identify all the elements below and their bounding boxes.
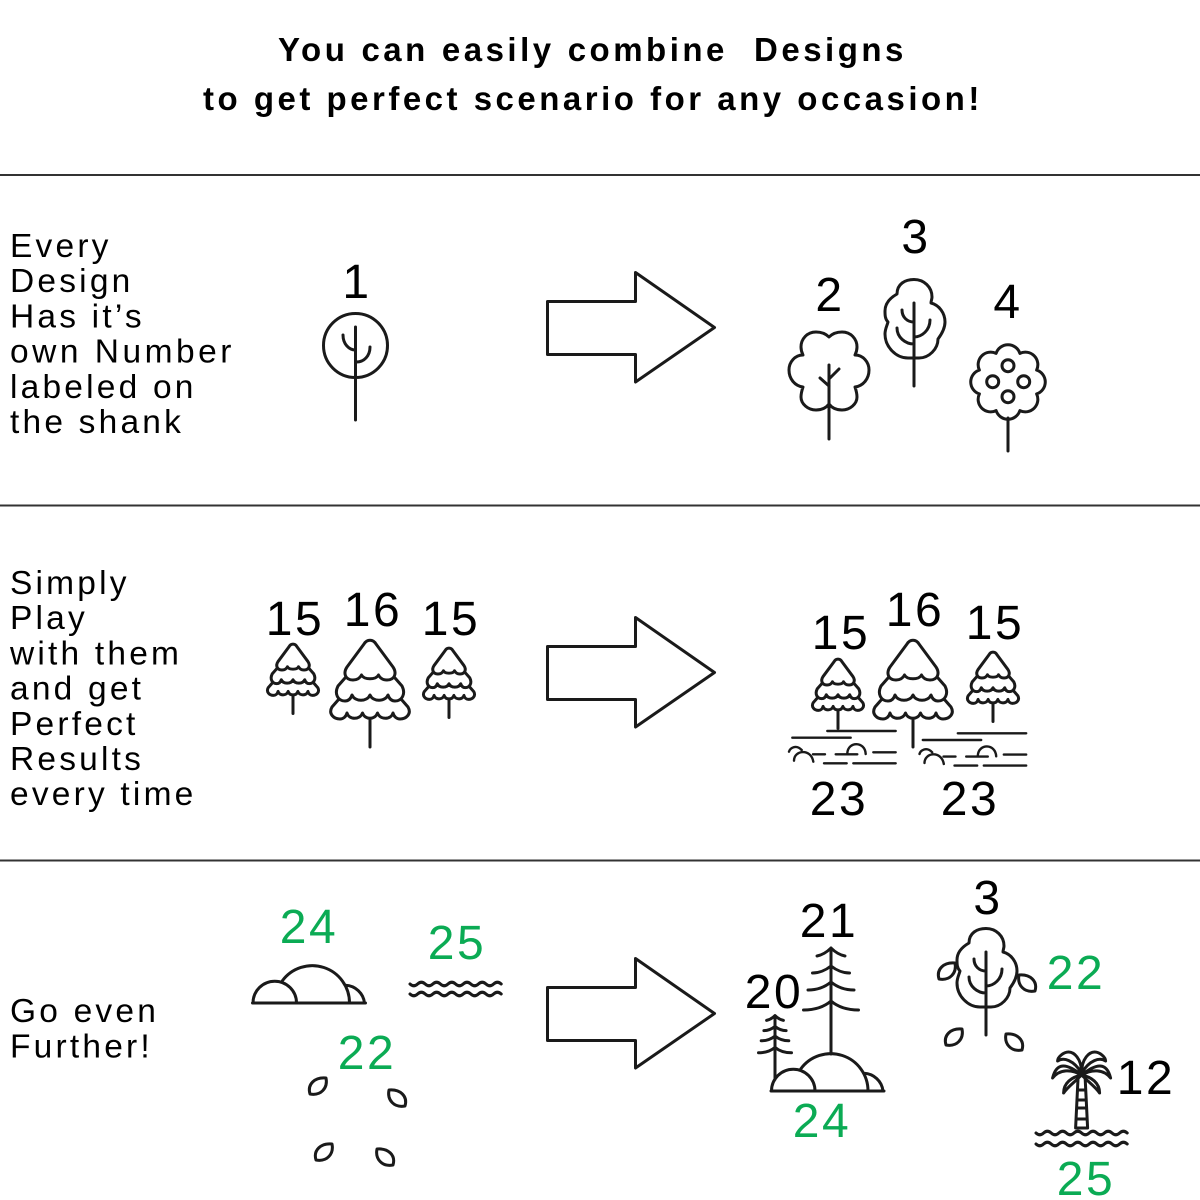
arrow [548, 618, 714, 727]
icon: pine 15 right: 15 [422, 593, 480, 646]
icon: tree 1 [324, 256, 388, 420]
icon: water 25: 25 [428, 917, 486, 970]
icon: tree 2 [789, 269, 869, 439]
arrow [548, 958, 714, 1068]
combined scene: pines on hills: 24 [793, 1095, 851, 1148]
combined scene: pines on hills: 21 [800, 895, 858, 948]
text block: row 2 description: every time [10, 776, 197, 813]
icon: tree 3: 3 [901, 211, 931, 264]
icon: pine 15 left [266, 593, 324, 714]
combined scene: pines and ground: 23 [941, 773, 999, 826]
combined scene: palm on water: 12 [1117, 1052, 1175, 1105]
text block: row 1 description: Has it’s [10, 298, 145, 335]
text block: row 1 description: own Number [10, 334, 235, 371]
arrow [548, 272, 714, 382]
title: to get perfect scenario for any occasion! [203, 80, 983, 117]
text block: row 3 description [10, 993, 159, 1066]
text block: row 2 description: and get [10, 671, 144, 708]
combined scene: palm on water [1036, 1052, 1175, 1200]
text block: row 2 description: with them [9, 635, 182, 672]
icon: pine 16: 16 [344, 584, 402, 637]
icon: leaves 22 [309, 1027, 406, 1165]
text block: row 2 description [9, 565, 197, 813]
combined scene: pines and ground: 15 [966, 597, 1024, 650]
combined scene: tree with leaves: 22 [1047, 947, 1105, 1000]
icon: tree 2: 2 [815, 269, 845, 322]
icon: hills 24: 24 [280, 901, 338, 954]
text block: row 1 description: labeled on [10, 369, 197, 406]
combined scene: tree with leaves: 3 [973, 872, 1003, 925]
icon: tree 4: 4 [993, 276, 1023, 329]
text block: row 2 description: Results [10, 741, 144, 778]
combined scene: pines on hills [745, 895, 884, 1148]
icon: pine 15 right [422, 593, 480, 718]
icon: tree 4 [971, 276, 1045, 451]
text block: row 1 description: the shank [10, 404, 184, 441]
icon: tree 1: 1 [342, 256, 372, 309]
icon: water 25 [410, 917, 501, 996]
text block: row 1 description: Design [10, 263, 133, 300]
panel: simply play with them [9, 565, 1026, 826]
icon: tree 3 [885, 211, 945, 386]
combined scene: pines and ground: 16 [886, 584, 944, 637]
text block: row 2 description: Play [10, 600, 88, 637]
title [203, 31, 983, 117]
combined scene: pines and ground [789, 584, 1026, 826]
text block: row 3 description: Further! [10, 1028, 153, 1066]
text block: row 1 description: Every [10, 228, 112, 265]
combined scene: pines and ground: 15 [812, 607, 870, 660]
panel: every design has its own number [10, 211, 1045, 451]
combined scene: pines and ground: 23 [810, 773, 868, 826]
text block: row 3 description: Go even [10, 993, 159, 1030]
title: You can easily combine Designs [278, 31, 907, 68]
text block: row 1 description [10, 228, 235, 441]
combined scene: pines on hills: 20 [745, 966, 803, 1019]
combined scene: tree with leaves [938, 872, 1105, 1050]
icon: leaves 22: 22 [338, 1027, 396, 1080]
panel: go even further [10, 872, 1175, 1200]
icon: pine 15 left: 15 [266, 593, 324, 646]
text block: row 2 description: Perfect [10, 706, 139, 743]
icon: hills 24 [252, 901, 366, 1003]
icon: pine 16 [331, 584, 409, 747]
text block: row 2 description: Simply [10, 565, 130, 602]
